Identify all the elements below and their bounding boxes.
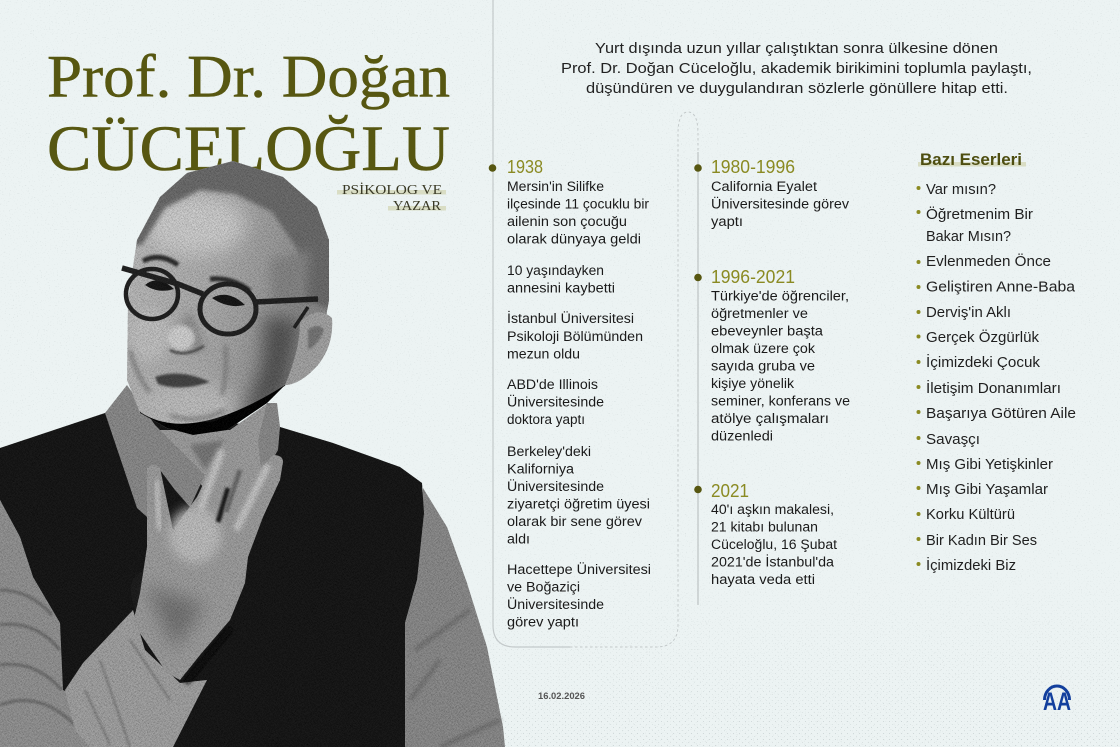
works list: Derviş'in Aklı bbox=[926, 305, 1011, 321]
date: 16.02.2026 bbox=[538, 691, 585, 702]
works list: Öğretmenim Bir bbox=[926, 205, 1033, 223]
entry 1996-2021: öğretmenler ve bbox=[711, 306, 808, 321]
entry 1980-1996: yaptı bbox=[711, 214, 743, 229]
entries: Üniversitesinde bbox=[507, 597, 604, 612]
entry 1980-1996: Üniversitesinde görev bbox=[711, 196, 849, 212]
entry 1996-2021: kişiye yönelik bbox=[711, 376, 794, 391]
timeline column 1 bbox=[489, 157, 651, 630]
cuff bbox=[65, 610, 207, 747]
vest bbox=[0, 413, 424, 747]
entry 2021 bbox=[694, 481, 837, 587]
entries: Psikoloji Bölümünden bbox=[507, 329, 643, 344]
entries bbox=[507, 179, 651, 630]
entry 1980-1996: California Eyalet bbox=[711, 179, 817, 194]
entries: Berkeley'deki bbox=[507, 444, 591, 459]
hand bbox=[133, 441, 283, 683]
entry 1980-1996: 1980-1996 bbox=[711, 157, 795, 177]
works list: İletişim Donanımları bbox=[926, 379, 1061, 397]
works list: İçimizdeki Çocuk bbox=[926, 353, 1041, 371]
works list: Savaşçı bbox=[926, 432, 980, 448]
entries: ve Boğaziçi bbox=[507, 580, 580, 594]
glasses bbox=[122, 268, 318, 334]
works list: Başarıya Götüren Aile bbox=[926, 406, 1076, 422]
entry 2021: 2021 bbox=[711, 481, 749, 501]
entries: olarak dünyaya geldi bbox=[507, 232, 641, 246]
title bbox=[47, 44, 450, 185]
entries: annesini kaybetti bbox=[507, 280, 615, 296]
works heading: Bazı Eserleri bbox=[920, 151, 1022, 169]
entries: görev yaptı bbox=[507, 614, 579, 630]
entries: Üniversitesinde bbox=[507, 394, 604, 410]
entries: olarak bir sene görev bbox=[507, 514, 642, 529]
works list: Korku Kültürü bbox=[926, 507, 1015, 523]
shirt collar bbox=[105, 385, 280, 517]
left sleeve bbox=[0, 500, 90, 747]
timeline column 2 bbox=[694, 157, 850, 587]
subtitle bbox=[337, 182, 446, 214]
entries: ilçesinde 11 çocuklu bir bbox=[507, 196, 650, 212]
head bbox=[127, 161, 329, 435]
entries: mezun oldu bbox=[507, 346, 580, 362]
intro text: Prof. Dr. Doğan Cüceloğlu, akademik birikimini toplumla paylaştı, bbox=[561, 61, 1032, 77]
entry 1996-2021 bbox=[694, 267, 850, 444]
entries: ABD'de Illinois bbox=[507, 377, 598, 392]
marker 1938 bbox=[489, 164, 496, 172]
entry 2021: 40'ı aşkın makalesi, bbox=[711, 502, 834, 517]
works list: Bir Kadın Bir Ses bbox=[926, 533, 1037, 549]
works list: Gerçek Özgürlük bbox=[926, 328, 1040, 346]
ear bbox=[285, 312, 332, 385]
entry 2021: 21 kitabı bulunan bbox=[711, 520, 818, 534]
entries: ailenin son çocuğu bbox=[507, 214, 627, 229]
neck bbox=[160, 403, 275, 500]
eyebrows bbox=[143, 257, 250, 291]
works list: Var mısın? bbox=[926, 182, 996, 198]
entries: Kaliforniya bbox=[507, 462, 575, 476]
year 1938: 1938 bbox=[507, 157, 543, 177]
works list: İçimizdeki Biz bbox=[926, 556, 1016, 574]
works list: Bakar Mısın? bbox=[926, 229, 1011, 245]
entry 2021: Cüceloğlu, 16 Şubat bbox=[711, 537, 837, 552]
eyes bbox=[145, 280, 245, 306]
entry 1996-2021: seminer, konferans ve bbox=[711, 394, 850, 408]
entry 1996-2021: sayıda gruba ve bbox=[711, 358, 815, 374]
works list: Evlenmeden Önce bbox=[926, 252, 1051, 270]
portrait bbox=[0, 155, 505, 747]
entry 1996-2021: olmak üzere çok bbox=[711, 341, 815, 356]
entry 1996-2021: düzenledi bbox=[711, 428, 773, 444]
entries: Hacettepe Üniversitesi bbox=[507, 562, 651, 577]
intro text bbox=[561, 41, 1032, 97]
entry 1996-2021: 1996-2021 bbox=[711, 267, 795, 287]
works list: Mış Gibi Yaşamlar bbox=[926, 482, 1048, 498]
intro text: Yurt dışında uzun yıllar çalıştıktan sonra ülkesine dönen bbox=[595, 41, 998, 57]
entries: aldı bbox=[507, 532, 530, 546]
works list: Mış Gibi Yetişkinler bbox=[926, 457, 1053, 473]
right sleeve bbox=[405, 488, 505, 747]
works list bbox=[916, 182, 1076, 574]
entry 1980-1996 bbox=[694, 157, 849, 229]
timeline path bbox=[493, 0, 698, 647]
entry 2021: hayata veda etti bbox=[711, 572, 815, 587]
subtitle: YAZAR bbox=[393, 199, 442, 214]
works list: Geliştiren Anne-Baba bbox=[926, 280, 1076, 296]
title: Prof. Dr. Doğan bbox=[47, 44, 450, 110]
subtitle: PSİKOLOG VE bbox=[342, 182, 442, 198]
entries: İstanbul Üniversitesi bbox=[507, 311, 634, 326]
entry 1996-2021: Türkiye'de öğrenciler, bbox=[711, 288, 849, 304]
title: CÜCELOĞLU bbox=[47, 113, 450, 185]
entries: Üniversitesinde bbox=[507, 479, 604, 494]
entries: doktora yaptı bbox=[507, 412, 585, 427]
entry 1996-2021: atölye çalışmaları bbox=[711, 411, 829, 426]
entries: Mersin'in Silifke bbox=[507, 179, 604, 194]
entry 2021: 2021'de İstanbul'da bbox=[711, 554, 835, 570]
entry 1996-2021: ebeveynler başta bbox=[711, 324, 824, 338]
entries: ziyaretçi öğretim üyesi bbox=[507, 496, 650, 512]
icon: AA logo: AA bbox=[1043, 688, 1071, 716]
entries: 10 yaşındayken bbox=[507, 263, 604, 278]
intro text: düşündüren ve duygulandıran sözlerle gönüllere hitap etti. bbox=[586, 81, 1008, 97]
